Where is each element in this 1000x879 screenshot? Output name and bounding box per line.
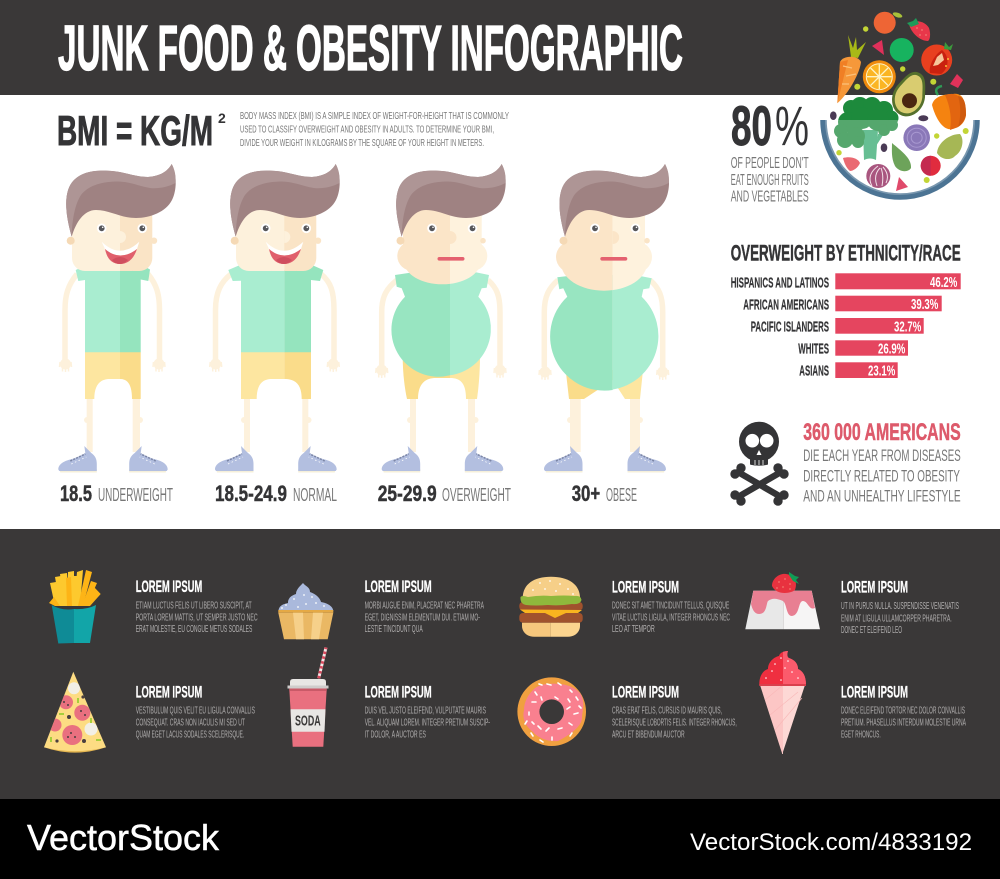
citrus slice: [863, 60, 896, 93]
bar: Hispanics and Latinos: HISPANICS AND LATINOS: [731, 274, 829, 291]
bar: Whites: WHITES: [798, 340, 829, 357]
text: lorem ipsum 6: IT DOLOR, A AUCTOR ES: [365, 729, 426, 741]
radish: [921, 156, 941, 176]
lettuce: [937, 134, 962, 159]
text: lorem ipsum 7: CRAS ERAT FELIS, CURSUS ID MAURIS QUIS,: [612, 704, 722, 716]
text: OBESE: [606, 485, 637, 505]
label: obese: 30+: [572, 481, 600, 506]
label: overweight: OVERWEIGHT: [442, 485, 511, 505]
icon: soda cup: [288, 648, 328, 747]
icon: cupcake: [278, 583, 333, 639]
tomato: [921, 42, 953, 76]
text: lorem ipsum 1: [136, 577, 258, 635]
text: VITAE LUCTUS LIGULA, INTEGER RHONCUS NEC: [612, 611, 730, 623]
label: normal: NORMAL: [293, 485, 337, 505]
footer logo: VectorStock: [27, 817, 220, 858]
green cabbage: [890, 38, 914, 62]
text: EAT ENOUGH FRUITS: [731, 172, 809, 189]
strawberry in bowl: [843, 157, 860, 171]
figure: overweight man: [376, 164, 506, 472]
icon: french fries: [49, 570, 101, 644]
stat: 80 percent: 80: [731, 94, 772, 157]
bar: Pacific Islanders: PACIFIC ISLANDERS: [751, 318, 829, 335]
text: SCELERISQUE LOBORTIS FELIS. INTEGER RHONCUS,: [612, 717, 737, 729]
label: overweight: [378, 481, 511, 506]
text: lorem ipsum 4: DONEC ET ELEIFEND LEO: [841, 624, 902, 636]
text: DONEC SIT AMET TINCIDUNT TELLUS, QUISQUE: [612, 599, 729, 611]
bar: Asians: [799, 362, 898, 380]
text: lorem ipsum 8: LOREM IPSUM: [841, 683, 908, 702]
footer url: VectorStock.com/4833192: [690, 829, 972, 856]
figure: obese man: [539, 164, 669, 472]
BMI description: [240, 110, 509, 149]
text: lorem ipsum 1: LOREM IPSUM: [136, 577, 202, 596]
bar: Pacific Islanders: 32.7%: [894, 318, 921, 335]
icon: donut: [517, 677, 586, 746]
bell pepper: [932, 86, 966, 130]
strawberry: [907, 18, 930, 41]
BMI description: DIVIDE YOUR WEIGHT IN KILOGRAMS BY THE SQUARE OF YOUR HEIGHT IN METERS.: [240, 137, 484, 149]
icon: skull and crossbones: [730, 422, 789, 506]
text: lorem ipsum 7: [612, 683, 737, 740]
spinach leaf: [892, 143, 911, 171]
onion: [866, 164, 890, 188]
bar: Whites: [798, 340, 908, 357]
panel: junk food band: [0, 529, 1000, 799]
raspberry top: [872, 40, 884, 55]
bar: Asians: 23.1%: [868, 362, 895, 380]
text: lorem ipsum 6: DUIS VEL JUSTO ELEIFEND, VULPUTATE MAURIS: [365, 705, 486, 717]
text: lorem ipsum 3: [612, 578, 730, 635]
icon: bowl of fruit and vegetables: [824, 11, 976, 196]
text: lorem ipsum 2: [365, 577, 484, 635]
text: lorem ipsum 5: CONSEQUAT. CRAS NON IACULIS MI SED UT: [136, 717, 245, 729]
label: overweight: 25-29.9: [378, 481, 437, 506]
text: lorem ipsum 2: LOREM IPSUM: [365, 577, 432, 596]
fries box: [52, 605, 74, 644]
stat: 80 percent: AND VEGETABLES: [731, 189, 809, 206]
text: lorem ipsum 3: LEO AT TEMPOR: [612, 623, 655, 635]
avocado seed: [902, 93, 917, 108]
text: lorem ipsum 5: LOREM IPSUM: [136, 682, 202, 701]
text: VEL. ALIQUAM LOREM. INTEGER PRETIUM SUSCIP-: [365, 717, 490, 729]
stat: 360 000 Americans: [803, 419, 961, 506]
label: underweight: 18.5: [60, 481, 92, 506]
raspberry right: [950, 74, 963, 88]
text: lorem ipsum 6: LOREM IPSUM: [365, 682, 432, 701]
text: lorem ipsum 5: QUAM EGET LACUS SODALES SCELERISQUE.: [136, 729, 244, 741]
icon: strawberry cake: [745, 572, 820, 629]
bar: African Americans: 39.3%: [911, 296, 938, 313]
text: PORTA LOREM MATTIS, UT SEMPER JUSTO NEC: [136, 611, 258, 623]
text: lorem ipsum 7: ARCU ET BIBENDUM AUCTOR: [612, 728, 685, 740]
leaf: [892, 11, 903, 19]
strawberry on cake: [772, 572, 799, 593]
figure: underweight man: [58, 164, 176, 472]
text: VESTIBULUM QUIS VELIT EU LIGULA CONVALLIS: [136, 705, 255, 717]
raspberry in bowl: [896, 177, 908, 191]
bar: Hispanics and Latinos: 46.2%: [930, 274, 957, 291]
chart: overweight by ethnicity: [731, 241, 961, 380]
text: lorem ipsum 1: ETIAM LUCTUS FELIS UT LIBERO SUSCIPIT, AT: [136, 599, 252, 611]
text: lorem ipsum 3: LOREM IPSUM: [612, 578, 679, 597]
icon: ice cream cone: [759, 651, 806, 754]
text: lorem ipsum 8: [841, 683, 966, 740]
label: underweight: [60, 481, 173, 506]
text: lorem ipsum 4: [841, 578, 959, 636]
avocado: [887, 67, 933, 121]
text: lorem ipsum 7: LOREM IPSUM: [612, 683, 679, 702]
text: EGET, DIGNISSIM ELEMENTUM DUI. ETIAM MO-: [365, 611, 480, 623]
footer band: [0, 799, 1000, 879]
label: underweight: UNDERWEIGHT: [98, 485, 173, 505]
broccoli: [834, 97, 898, 160]
purple cabbage: [903, 124, 930, 151]
header band: [0, 0, 1000, 95]
BMI formula: BMI = KG/M: [57, 107, 213, 154]
label: normal: 18.5-24.9: [215, 481, 287, 506]
seeds and peas: [836, 26, 969, 183]
bar: Asians: ASIANS: [799, 363, 829, 380]
icon: pizza slice: [44, 672, 106, 753]
figure: normal man: [210, 164, 340, 472]
stat: 80 percent: OF PEOPLE DON'T: [731, 155, 809, 172]
orange: [874, 12, 896, 34]
text: ERAT MOLESTIE, EU CONGUE METUS SODALES: [136, 623, 252, 635]
BMI description: BODY MASS INDEX (BMI) IS A SIMPLE INDEX OF WEIGHT-FOR-HEIGHT THAT IS COMMONLY: [240, 110, 509, 122]
bar: African Americans: AFRICAN AMERICANS: [743, 296, 829, 313]
BMI description: USED TO CLASSIFY OVERWEIGHT AND OBESITY IN ADULTS. TO DETERMINE YOUR BMI,: [240, 124, 494, 136]
bowl: [824, 120, 976, 196]
text: lorem ipsum 2: LESTIE TINCIDUNT QUA: [365, 623, 423, 635]
text: MORBI AUGUE ENIM, PLACERAT NEC PHARETRA: [365, 599, 484, 611]
carrot: [837, 35, 866, 103]
icon: soda cup: SODA: [295, 713, 321, 730]
label: obese: [572, 481, 637, 506]
text: lorem ipsum 4: LOREM IPSUM: [841, 578, 908, 597]
translucent bowl tint: [825, 120, 975, 195]
stat: 80 percent: %: [775, 94, 809, 157]
dark beans: [830, 111, 928, 152]
bar: Whites: 26.9%: [878, 340, 905, 357]
text: lorem ipsum 8: EGET RHONCUS.: [841, 728, 881, 740]
BMI formula: 2: [218, 110, 226, 126]
icon: burger: [519, 577, 583, 637]
stat: 80 percent: [731, 94, 809, 206]
text: lorem ipsum 5: [136, 682, 255, 741]
text: lorem ipsum 6: [365, 682, 490, 741]
